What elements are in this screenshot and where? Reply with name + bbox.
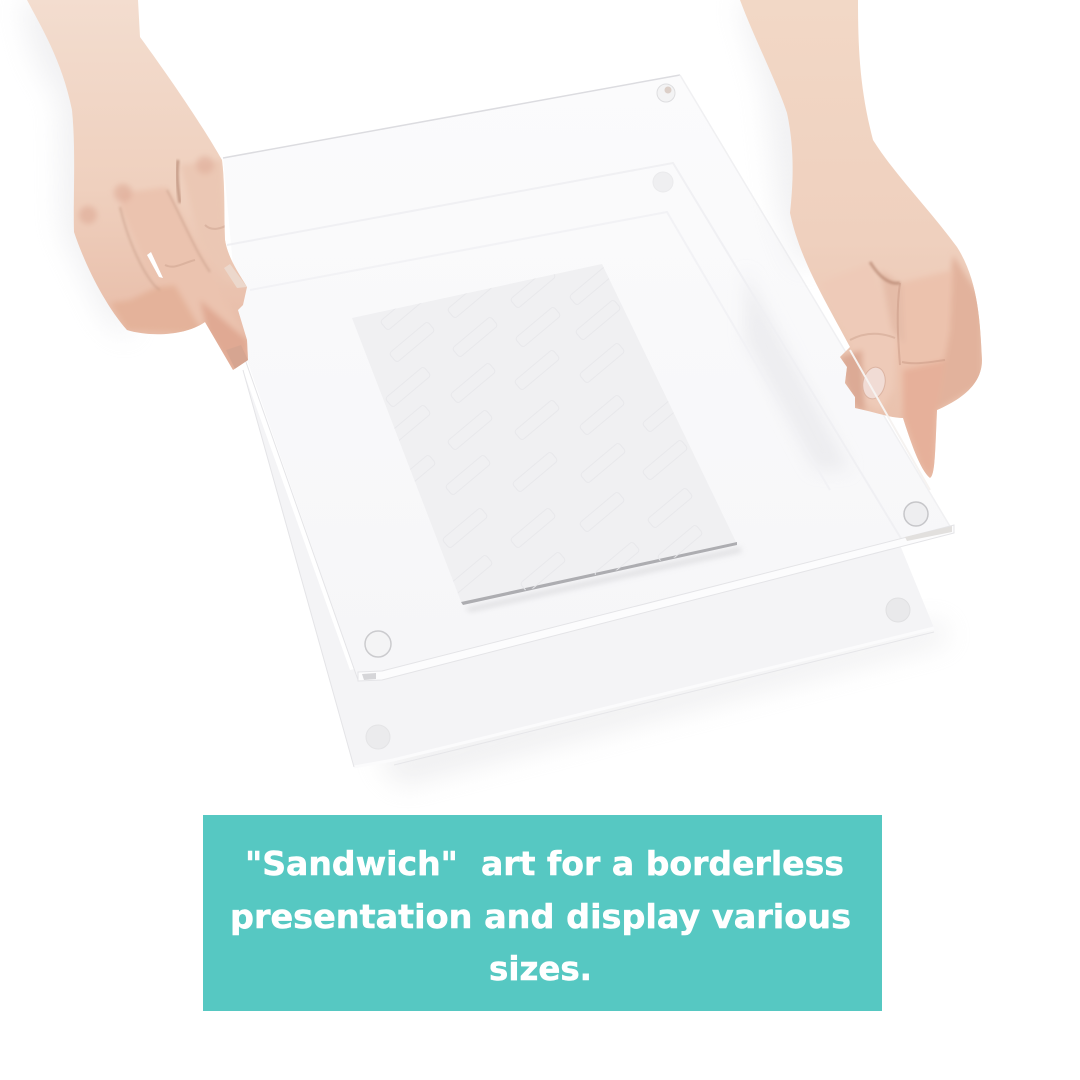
icon: right hand bbox=[735, 0, 985, 490]
icon: upper sheet holes bbox=[365, 84, 928, 657]
panel: lower acrylic sheet bbox=[243, 370, 950, 785]
icon: left hand nails bbox=[224, 264, 248, 371]
icon: left hand gap bbox=[147, 252, 163, 278]
icon: right hand thumbnail bbox=[860, 365, 888, 401]
icon: lower sheet holes bbox=[366, 598, 910, 749]
panel: backing paper print bbox=[352, 264, 742, 612]
text: caption: sizes. bbox=[489, 949, 592, 988]
text: caption: presentation and display various bbox=[230, 897, 851, 936]
panel: upper acrylic sheet bbox=[223, 75, 954, 681]
icon: left hand bbox=[20, 0, 255, 375]
text: caption: "Sandwich" art for a borderless bbox=[245, 844, 844, 883]
icon: sheet edge over fingers bbox=[850, 350, 930, 490]
panel: teal caption box bbox=[0, 0, 882, 1011]
